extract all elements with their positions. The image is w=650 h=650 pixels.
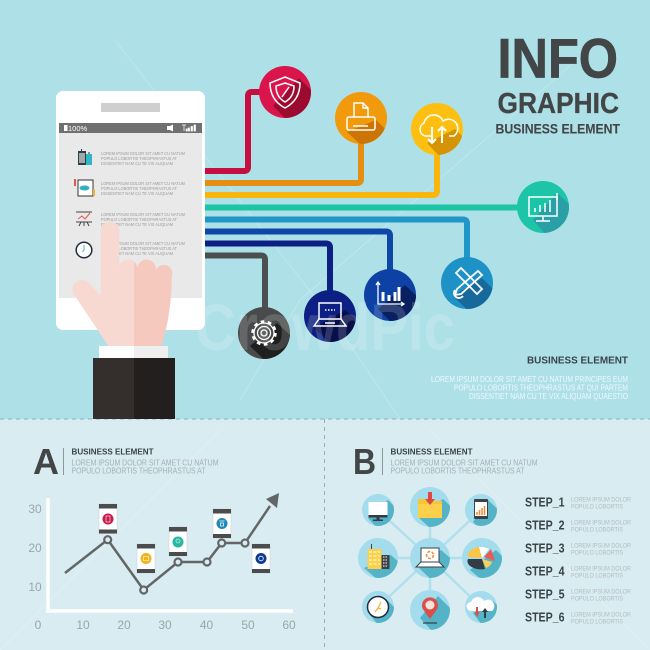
text block: lower right: BUSINESS ELEMENT <box>527 354 629 366</box>
x axis labels: 60 <box>282 618 296 632</box>
screen text rows: POPULO LOBORTIS THEOPHRASTUS AT <box>101 217 177 223</box>
shirt cuff <box>99 346 168 358</box>
step 5: POPULO LOBORTIS <box>571 596 624 602</box>
screen text rows: LOREM IPSUM DOLOR SIT AMET CU NATUM <box>101 212 185 218</box>
step 4: STEP_4 <box>525 564 565 578</box>
hand <box>72 222 172 346</box>
step 2 <box>525 518 631 534</box>
step 2: STEP_2 <box>525 518 564 532</box>
y axis labels <box>28 502 42 594</box>
icon: clock <box>76 242 92 258</box>
step 1: POPULO LOBORTIS <box>571 504 624 510</box>
step 6: POPULO LOBORTIS <box>571 618 624 626</box>
screen text rows: DISSENTIET NAM CU TE VIX ALIQUAM <box>101 161 173 167</box>
phone body <box>56 91 205 330</box>
icon: gear <box>238 307 290 359</box>
x axis labels: 10 <box>76 618 90 632</box>
y axis labels: 20 <box>28 541 42 555</box>
node: folder <box>410 487 450 527</box>
step 1 <box>525 494 631 510</box>
node: pie chart <box>462 538 502 578</box>
hub spokes <box>378 507 482 610</box>
screen text rows: DISSENTIET NAM CU TE VIX ALIQUAM <box>101 251 173 257</box>
panel A heading: A <box>33 441 59 482</box>
icon: cloud tablet <box>75 179 94 196</box>
panel A heading: LOREM IPSUM DOLOR SIT AMET CU NATUM <box>72 458 219 468</box>
x axis labels: 50 <box>241 618 255 632</box>
connector lines <box>205 92 530 320</box>
step 4 <box>525 564 631 580</box>
screen text rows: DISSENTIET NAM CU TE VIX ALIQUAM <box>101 222 173 228</box>
step 3: LOREM IPSUM DOLOR <box>571 542 631 550</box>
watermark: CrowdPic <box>195 290 455 364</box>
text block: lower right <box>431 354 629 401</box>
mini phone 4 <box>213 509 231 538</box>
screen text rows: LOREM IPSUM DOLOR SIT AMET CU NATUM <box>101 181 185 187</box>
panel B heading <box>353 441 538 482</box>
icon: monitor chart <box>517 181 569 233</box>
node: map pin <box>410 590 450 630</box>
step 1: STEP_1 <box>525 494 564 510</box>
screen text rows: POPULO LOBORTIS THEOPHRASTUS AT <box>101 186 177 192</box>
x axis labels: 20 <box>117 618 131 632</box>
status bar <box>59 123 202 133</box>
screen text rows: LOREM IPSUM DOLOR SIT AMET CU NATUM <box>101 151 185 157</box>
panel A heading: POPULO LOBORTIS THEOPHRASTUS AT <box>72 466 206 476</box>
step 6: STEP_6 <box>525 610 564 624</box>
panel B heading: B <box>353 441 376 482</box>
screen text rows: POPULO LOBORTIS THEOPHRASTUS AT <box>101 156 177 162</box>
node: tablet chart <box>465 494 497 526</box>
icon: printer <box>335 92 387 144</box>
mini phone 5 <box>252 544 270 573</box>
step 3: POPULO LOBORTIS <box>571 550 624 556</box>
title: INFO <box>498 26 618 90</box>
icon: shield <box>259 66 311 118</box>
step 6 <box>525 610 631 626</box>
mini phone 2 <box>137 544 155 573</box>
hub diagram <box>358 487 502 630</box>
panel B heading: POPULO LOBORTIS THEOPHRASTUS AT <box>390 466 525 476</box>
step 5: LOREM IPSUM DOLOR <box>571 588 631 596</box>
x axis labels: 30 <box>158 618 172 632</box>
screen text rows <box>101 151 185 257</box>
icon: pencil and ruler <box>441 257 493 309</box>
node: cloud <box>465 591 497 623</box>
title: BUSINESS ELEMENT <box>496 122 621 136</box>
icon: cloud transfer <box>411 103 463 155</box>
node: monitor <box>362 494 394 526</box>
node: clock <box>362 591 394 623</box>
screen text rows: LOREM IPSUM DOLOR SIT AMET CU NATUM <box>101 241 185 247</box>
line chart <box>28 493 296 632</box>
title <box>496 26 621 136</box>
panel: phone with hand <box>56 91 205 419</box>
step 2: LOREM IPSUM DOLOR <box>571 520 631 526</box>
trend arrow head <box>266 493 279 508</box>
step 3 <box>525 540 631 556</box>
step 6: LOREM IPSUM DOLOR <box>571 612 631 618</box>
step 4: LOREM IPSUM DOLOR <box>571 566 631 572</box>
icon: bar chart <box>364 269 416 321</box>
icon: laptop <box>304 290 356 342</box>
data points <box>104 536 248 594</box>
trend line <box>65 506 270 590</box>
mini phone 1 <box>99 504 117 534</box>
chart axes <box>48 498 293 611</box>
phone speaker <box>101 103 160 112</box>
phone screen <box>59 133 202 298</box>
title: GRAPHIC <box>498 88 619 120</box>
step list <box>525 494 631 626</box>
step 3: STEP_3 <box>525 540 564 556</box>
mini phone 3 <box>169 527 187 556</box>
step 5 <box>525 586 631 602</box>
x axis labels <box>35 618 296 632</box>
x axis labels: 40 <box>200 618 213 632</box>
panel A heading <box>33 441 219 482</box>
x axis labels: 0 <box>35 618 42 632</box>
y axis labels: 30 <box>28 502 42 516</box>
step 2: POPULO LOBORTIS <box>571 526 624 534</box>
panel B heading: LOREM IPSUM DOLOR SIT AMET CU NATUM <box>390 458 538 468</box>
step 5: STEP_5 <box>525 586 564 602</box>
step 4: POPULO LOBORTIS <box>571 572 624 580</box>
y axis labels: 10 <box>28 580 42 594</box>
icon: buildings <box>78 149 92 165</box>
icon: presentation board <box>76 212 92 226</box>
screen text rows: DISSENTIET NAM CU TE VIX ALIQUAM <box>101 191 173 197</box>
panel A heading: BUSINESS ELEMENT <box>72 446 154 456</box>
status bar: 100% <box>68 124 88 133</box>
panel B heading: BUSINESS ELEMENT <box>390 446 473 456</box>
screen text rows: POPULO LOBORTIS THEOPHRASTUS AT <box>101 246 177 252</box>
node: laptop centre <box>410 538 450 578</box>
node: buildings <box>358 538 398 578</box>
jacket sleeve <box>93 358 175 419</box>
step 1: LOREM IPSUM DOLOR <box>571 496 631 504</box>
